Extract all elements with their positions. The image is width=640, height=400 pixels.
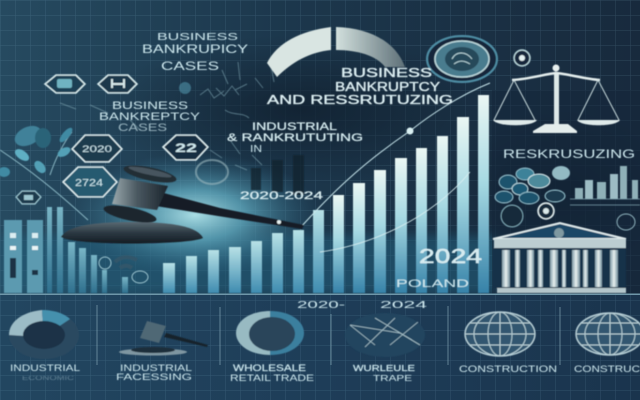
period label bbox=[297, 299, 427, 311]
processing label: FACESSING bbox=[116, 372, 192, 382]
chart heading top: CASES bbox=[161, 59, 219, 73]
scales of justice bbox=[493, 64, 620, 133]
wholesale label: WHOLESALE bbox=[233, 363, 306, 373]
wholesale label: RETAIL TRADE bbox=[230, 373, 314, 383]
scattered small icons under gavel bbox=[99, 257, 148, 283]
gavel bbox=[61, 162, 304, 244]
main title bbox=[267, 65, 453, 107]
chart heading second: BUSINESS bbox=[112, 100, 188, 112]
trend line bbox=[300, 83, 490, 252]
hexagon icon 2 bbox=[98, 75, 137, 93]
small gavel icon bbox=[119, 321, 208, 356]
construction label clipped: CONSTRUC bbox=[574, 364, 640, 375]
year 2024 and country label bbox=[396, 246, 482, 290]
subtitle: & RANKRUTUTING bbox=[227, 132, 363, 144]
year hexagon 22: 22 bbox=[175, 141, 198, 155]
chart heading top bbox=[142, 32, 248, 73]
background bbox=[0, 0, 640, 294]
small hexagon icon bbox=[16, 191, 41, 204]
seal emblem bbox=[427, 36, 497, 82]
period label: 2020- bbox=[297, 299, 346, 311]
main title: BUSINESS bbox=[341, 65, 432, 80]
industrial label bbox=[10, 363, 80, 382]
globe icon 2 bbox=[576, 313, 640, 355]
chart heading top: BUSINESS bbox=[157, 32, 239, 43]
period label: 2024 bbox=[380, 299, 427, 311]
plant illustration bbox=[0, 122, 88, 220]
network icon bbox=[345, 313, 425, 357]
year hexagon 22 bbox=[163, 135, 208, 160]
scattered clutter bbox=[60, 60, 274, 184]
year hexagon 2024 bbox=[63, 167, 117, 197]
courthouse bbox=[493, 223, 626, 293]
year 2024 and country label: POLAND bbox=[396, 278, 469, 290]
ring icon bbox=[236, 311, 304, 355]
hexagon icon 1 bbox=[45, 75, 85, 93]
subtitle: INDUSTRIAL bbox=[252, 121, 337, 133]
subtitle: 2020-2024 bbox=[240, 190, 323, 202]
subtitle bbox=[227, 121, 363, 202]
trade label bbox=[353, 364, 415, 383]
chart heading second: BANKREPTCY bbox=[99, 111, 201, 123]
main title: AND RESSRUTUZING bbox=[267, 92, 453, 107]
left bar chart bbox=[4, 207, 128, 293]
trade label: TRAPE bbox=[373, 374, 412, 383]
construction label: CONSTRUCTION bbox=[459, 364, 557, 375]
restructuring label: RESKRUSUZING bbox=[503, 147, 635, 161]
small target icon bbox=[514, 50, 530, 66]
main title: BANKRUPTCY bbox=[335, 79, 440, 94]
year hexagon 2024: 2724 bbox=[75, 178, 104, 189]
year hexagon 2020: 2020 bbox=[82, 144, 112, 154]
processing label: INDUSTRIAL bbox=[120, 363, 192, 373]
background columns behind subtitle bbox=[251, 155, 304, 195]
chart heading second bbox=[99, 100, 201, 134]
trade label: WURLEULE bbox=[353, 364, 415, 373]
year 2024 and country label: 2024 bbox=[419, 246, 482, 268]
globe icon 1 bbox=[465, 312, 535, 356]
year hexagon 2020 bbox=[72, 135, 122, 162]
chart heading second: CASES bbox=[118, 122, 167, 134]
processing label bbox=[116, 363, 192, 382]
restructuring icon cluster bbox=[495, 166, 635, 230]
industrial label: ECONOMIC bbox=[22, 376, 75, 382]
subtitle: IN bbox=[250, 144, 262, 155]
small bar chart right bbox=[570, 166, 640, 205]
wholesale label bbox=[230, 363, 314, 383]
chart heading top: BANKRUPICY bbox=[142, 42, 248, 56]
top gauge arc bbox=[267, 27, 405, 77]
bottom strip panel bbox=[0, 294, 640, 400]
main rising bar chart bbox=[163, 95, 489, 293]
industrial label: INDUSTRIAL bbox=[10, 363, 80, 373]
donut icon bbox=[9, 310, 79, 359]
